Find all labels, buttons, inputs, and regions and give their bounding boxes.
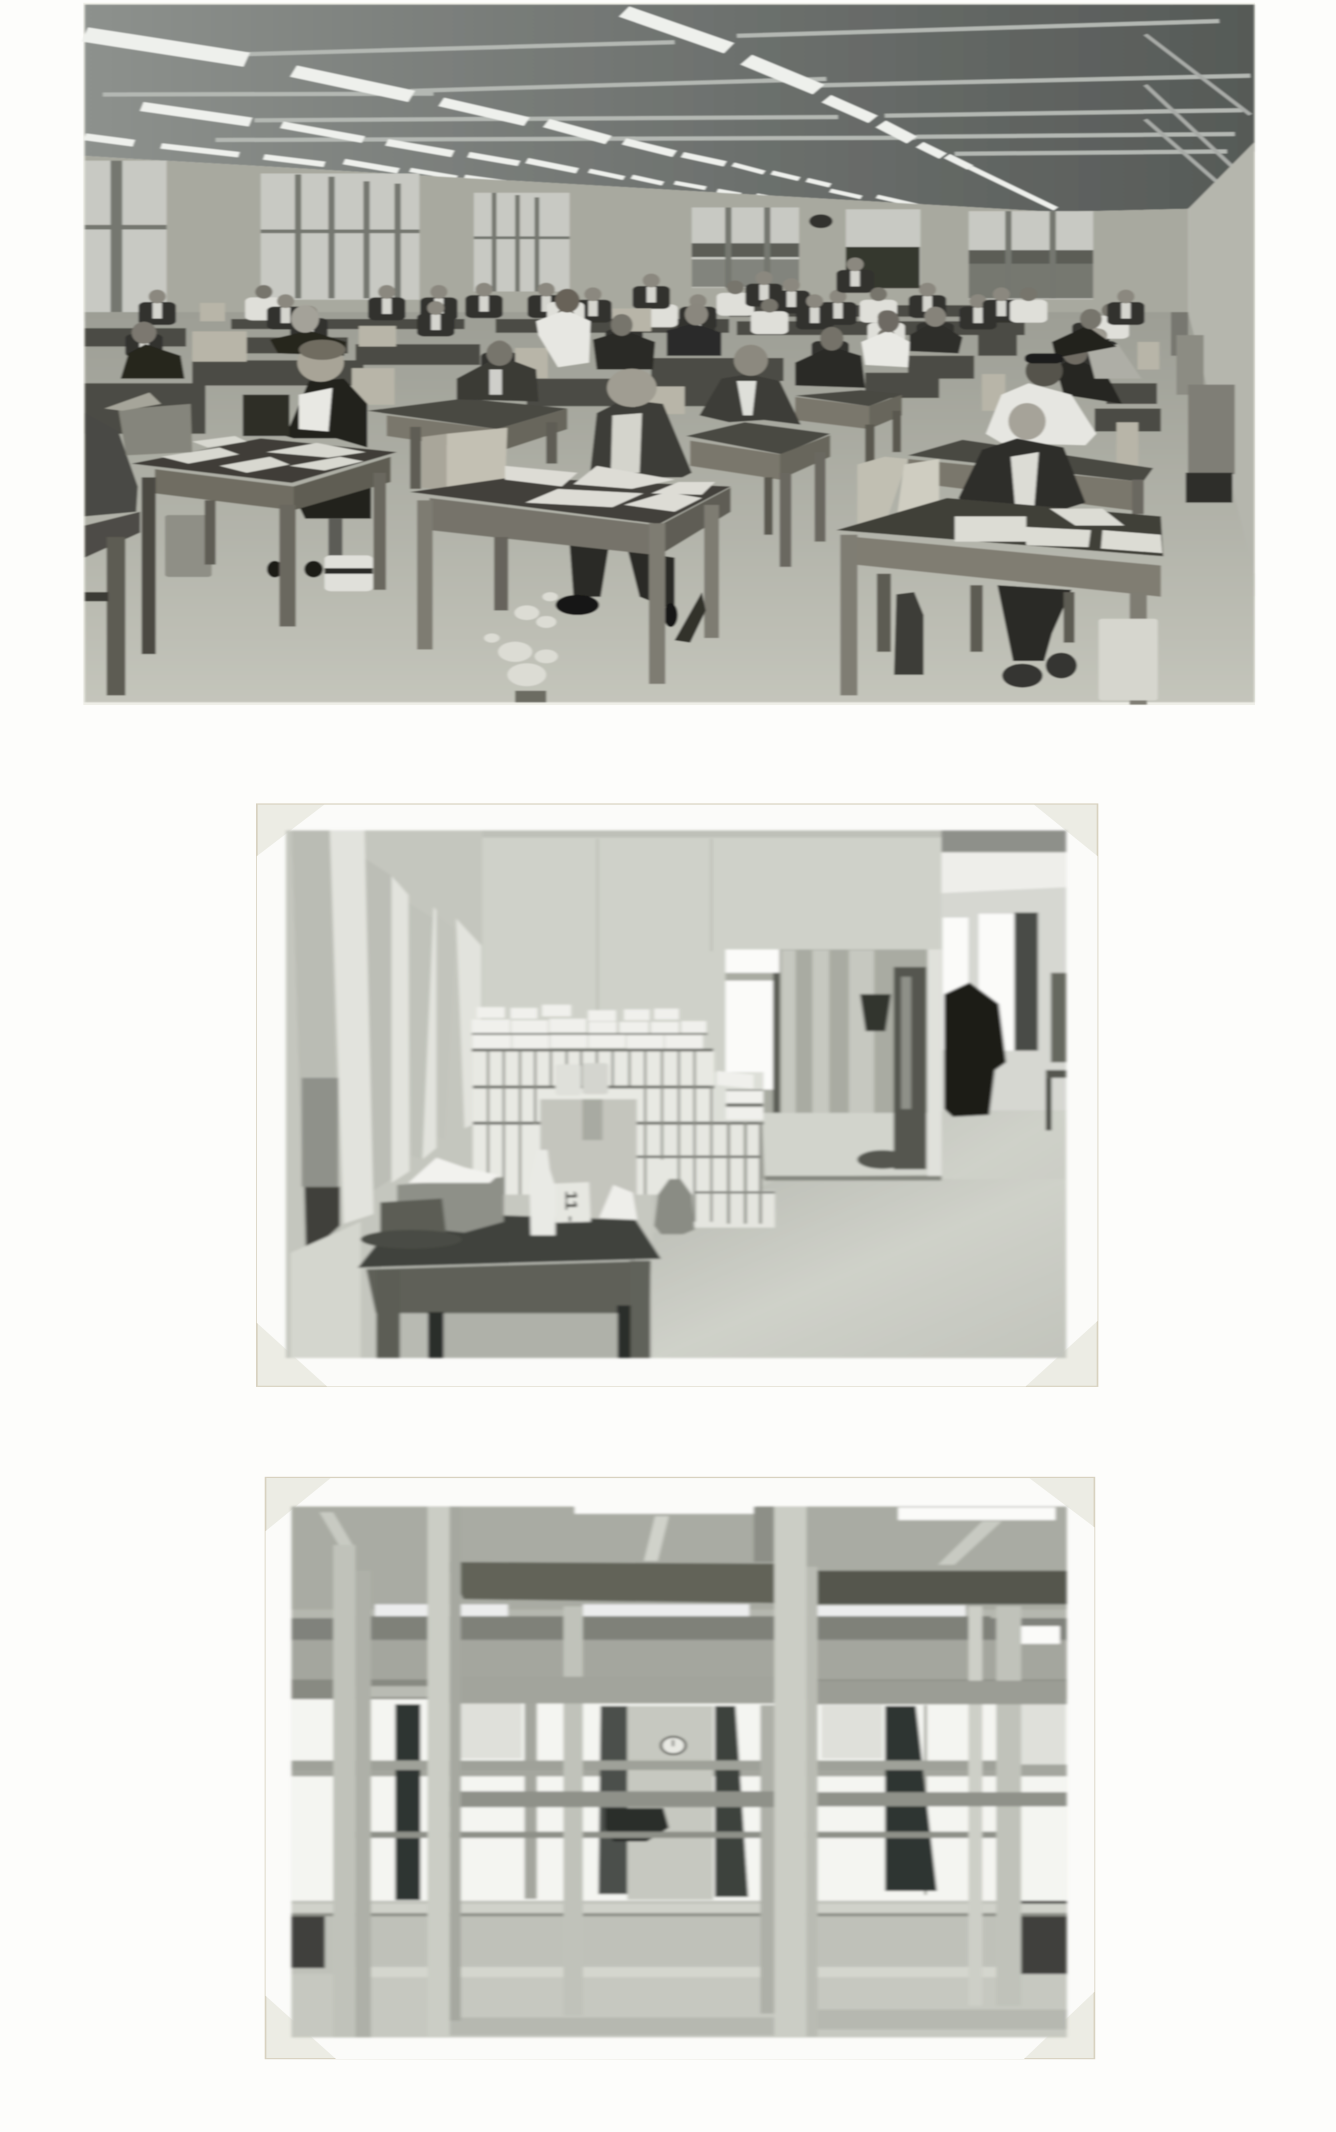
photo 1: examination hall with men at desks	[83, 3, 1255, 705]
far uprights	[333, 1545, 1021, 2037]
top lights	[575, 1504, 1056, 1520]
table	[358, 1212, 661, 1358]
coat on shelf	[605, 1808, 669, 1842]
far room with windows	[941, 830, 1066, 1111]
band above windows	[292, 1679, 1067, 1699]
small wicker demijohn	[654, 1179, 695, 1234]
mid-row seated people	[121, 289, 1141, 404]
waste bin	[165, 515, 212, 577]
far shelf rails	[292, 1616, 1067, 1977]
stack of boxes	[472, 1005, 775, 1228]
photo 3: empty wooden shelving in front of windows	[266, 1477, 1094, 2059]
labels leaning on table	[554, 1182, 637, 1223]
lower wall panel	[292, 1901, 1067, 1974]
white mounting corners and border	[257, 805, 1098, 1386]
right side wall	[1188, 142, 1254, 597]
ceiling fluorescent lights	[85, 11, 1056, 209]
wall clock	[661, 1737, 686, 1754]
woman at left desk	[243, 340, 371, 577]
wall panel seams	[481, 830, 941, 1014]
central wall pier with clock	[627, 1706, 713, 1900]
milk bottle	[530, 1150, 555, 1235]
ceiling	[292, 1507, 1067, 2037]
windows	[85, 161, 1093, 312]
man in white shirt at right	[986, 353, 1096, 445]
man at mid desk	[700, 345, 801, 425]
right wall cabinets	[1171, 312, 1235, 503]
vanity case	[325, 555, 373, 591]
papers right desk	[955, 509, 1162, 553]
main shelves	[439, 1562, 1067, 2035]
man at centre desk	[556, 369, 692, 627]
bright windows	[292, 1699, 1067, 1901]
flowers in vase	[484, 592, 558, 702]
back rows of desks	[85, 305, 1161, 434]
back wall	[286, 830, 1066, 1358]
white mounting corners and border	[266, 1478, 1094, 2059]
file box, centre	[422, 428, 507, 494]
ceiling beams	[103, 21, 1250, 211]
floor	[652, 1179, 1066, 1358]
floor	[85, 312, 1254, 702]
hat	[361, 1198, 462, 1249]
left-edge foreground figure	[85, 413, 138, 516]
small desk at left edge	[85, 512, 140, 695]
desk right foreground	[836, 498, 1163, 705]
back-row seated people	[125, 257, 1145, 380]
papers centre desk	[505, 466, 715, 512]
hanging dark coat	[944, 983, 1006, 1117]
open box with tissue	[397, 1158, 504, 1233]
file boxes, right	[857, 457, 939, 532]
stacks of file boxes behind	[192, 303, 1159, 466]
file box, left	[104, 392, 192, 455]
labels leaning on table: 11 -	[562, 1191, 581, 1222]
mid-row desks	[367, 390, 1153, 567]
desk left foreground	[132, 438, 397, 654]
door and wall clock	[846, 247, 920, 288]
cardboard box with rolls	[540, 1063, 637, 1224]
back wall	[85, 156, 1188, 321]
ceiling	[85, 5, 1254, 212]
doorway and corridor	[725, 949, 927, 1183]
man at right desk	[959, 403, 1085, 688]
ceiling beams and segmented band of lights	[292, 1512, 1067, 1679]
desk centre foreground	[410, 477, 731, 684]
papers left desk	[161, 436, 366, 473]
photo 2: stacked boxes beside a table	[257, 804, 1098, 1386]
floor	[292, 1974, 1067, 2037]
briefcase	[894, 592, 924, 675]
left window wall	[286, 830, 482, 1358]
main uprights	[428, 1507, 818, 2036]
white waste bin	[1099, 619, 1158, 700]
dark curtains	[395, 1704, 937, 1900]
